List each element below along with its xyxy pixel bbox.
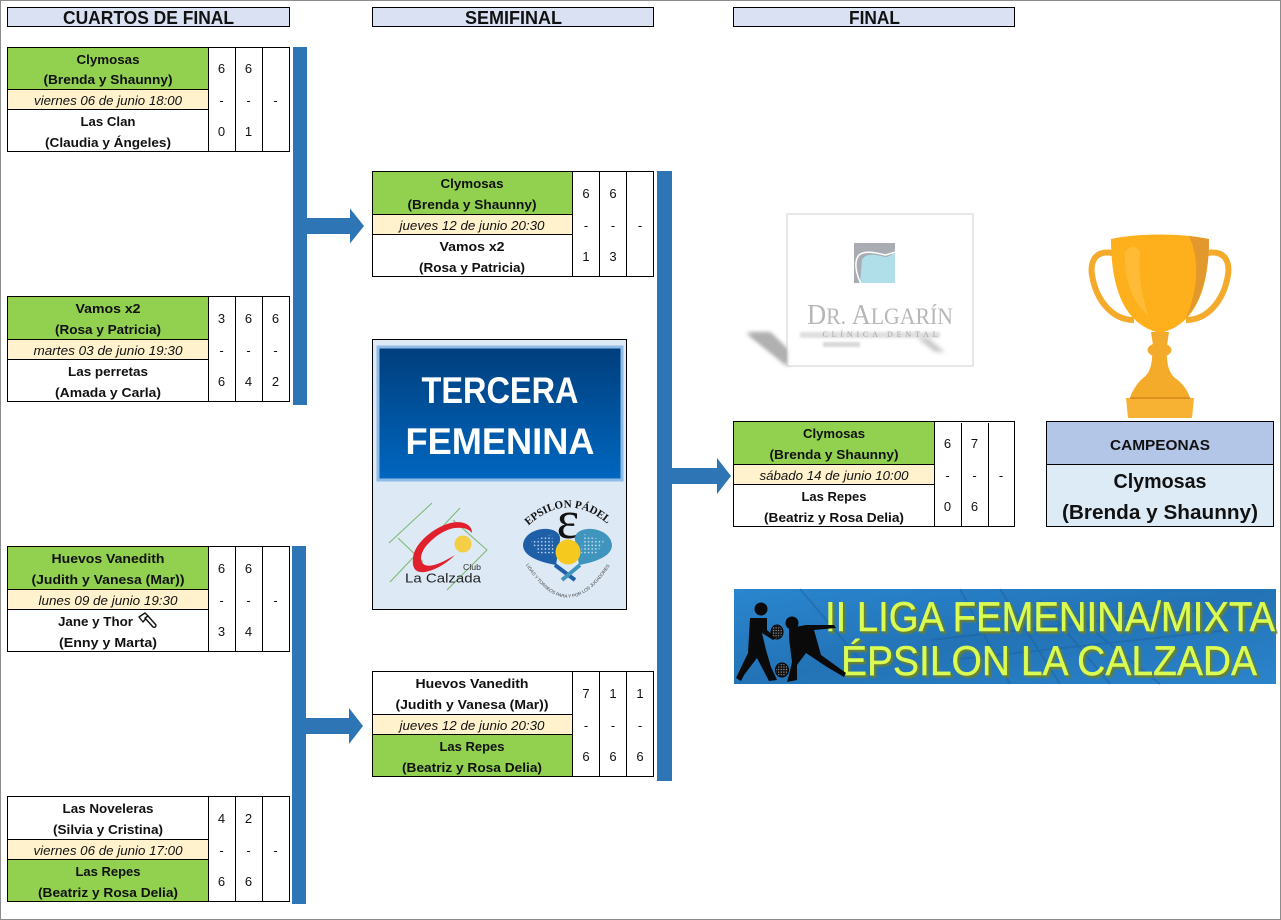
team 2: Las Repes — [802, 489, 866, 504]
team 1: Huevos Vanedith — [416, 676, 529, 691]
scores: 1 — [582, 249, 590, 264]
scores: - — [273, 93, 278, 108]
team 2: Las Repes — [440, 739, 504, 754]
bracket connector: lower quarterfinals to semifinal — [292, 546, 363, 904]
scores — [944, 436, 1003, 514]
icon: gold trophy — [1092, 234, 1228, 418]
team 1: (Judith y Vanesa (Mar)) — [32, 572, 185, 587]
team 1: Huevos Vanedith — [52, 551, 165, 566]
team 1: (Judith y Vanesa (Mar)) — [396, 697, 549, 712]
team 1 — [44, 52, 172, 87]
team 2 — [38, 864, 178, 900]
team 2: (Claudia y Ángeles) — [45, 135, 171, 150]
title box — [378, 347, 622, 480]
team 1: (Silvia y Cristina) — [53, 822, 163, 837]
team 1 — [53, 801, 163, 837]
match: quarterfinal 4 — [8, 796, 290, 902]
scores — [218, 61, 278, 139]
team 1: Vamos x2 — [76, 301, 140, 316]
team 2 — [55, 364, 161, 400]
team 2 — [419, 239, 525, 275]
scores: - — [999, 468, 1003, 483]
scores: - — [246, 843, 251, 858]
scores: - — [273, 593, 278, 608]
scores: 7 — [582, 686, 590, 701]
champion name: (Brenda y Shaunny) — [1062, 502, 1258, 524]
banner text: ÉPSILON LA CALZADA — [841, 637, 1257, 684]
banner text shadow — [827, 595, 1277, 686]
scores: 1 — [609, 686, 617, 701]
match date: jueves 12 de junio 20:30 — [397, 718, 545, 733]
scores — [582, 686, 644, 764]
scores: 2 — [245, 811, 252, 826]
team 1: Las Noveleras — [62, 801, 154, 816]
match: semifinal 1 — [372, 172, 654, 276]
bracket connector: semifinals to final — [657, 171, 731, 781]
logo: club la calzada: Club — [463, 562, 481, 572]
icon: padel players silhouettes — [736, 602, 846, 682]
scores: - — [972, 468, 977, 483]
team 1: Clymosas — [803, 426, 865, 441]
team 2: (Amada y Carla) — [55, 385, 161, 400]
heading: final — [734, 8, 1014, 28]
scores: 2 — [272, 374, 279, 389]
champion header: CAMPEONAS — [1110, 438, 1210, 454]
scores: 0 — [944, 499, 951, 514]
team 2: (Enny y Marta) — [59, 635, 157, 650]
scores: - — [638, 218, 642, 233]
heading: semifinal — [372, 8, 654, 28]
scores: 6 — [582, 749, 590, 764]
team 1: (Brenda y Shaunny) — [44, 72, 172, 87]
icon: hammer — [139, 613, 156, 627]
team 1: (Brenda y Shaunny) — [408, 197, 536, 212]
scores: 7 — [971, 436, 978, 451]
heading: final: FINAL — [849, 8, 900, 28]
scores: 6 — [245, 61, 252, 76]
scores: 6 — [218, 61, 225, 76]
scores: - — [246, 593, 251, 608]
team 1: Clymosas — [76, 52, 140, 67]
scores: 6 — [971, 499, 978, 514]
match date: sábado 14 de junio 10:00 — [760, 468, 909, 483]
team 1 — [55, 301, 161, 337]
scores: 4 — [245, 624, 252, 639]
scores: - — [611, 218, 615, 233]
team 2: Vamos x2 — [440, 239, 504, 254]
scores: 3 — [218, 624, 225, 639]
logo: epsilon padel: LIGAS Y TORNEOS PARA Y POR LOS JUGADORES — [526, 563, 610, 598]
match date: viernes 06 de junio 17:00 — [34, 843, 183, 858]
scores: 6 — [245, 874, 252, 889]
scores: - — [945, 468, 950, 483]
logo: club la calzada — [389, 503, 487, 590]
team 2: (Beatriz y Rosa Delia) — [38, 885, 178, 900]
scores: - — [611, 718, 615, 733]
team 2: Las perretas — [68, 364, 148, 379]
team 2: Jane y Thor — [58, 614, 133, 629]
scores: 6 — [218, 874, 225, 889]
scores — [218, 811, 278, 889]
team 2 — [45, 114, 171, 150]
scores: 6 — [636, 749, 644, 764]
logo: epsilon padel: EPSILON PÁDEL — [524, 500, 609, 526]
team 2 — [764, 489, 904, 525]
team 2 — [402, 739, 542, 775]
scores: 6 — [218, 374, 225, 389]
scores: 6 — [609, 186, 617, 201]
logo: epsilon padel: ε — [557, 490, 579, 550]
scores: - — [246, 93, 251, 108]
scores: 4 — [218, 811, 225, 826]
scores: 1 — [245, 124, 252, 139]
logo: dr algarin clinica dental: CLÍNICA DENTAL — [822, 329, 938, 339]
scores: - — [219, 843, 224, 858]
scores: 3 — [218, 311, 225, 326]
scores: 6 — [609, 749, 617, 764]
scores: 6 — [245, 561, 252, 576]
team 1: Clymosas — [440, 176, 504, 191]
team 1 — [32, 551, 185, 587]
champion name — [1062, 471, 1258, 524]
logo: epsilon padel — [523, 490, 612, 598]
team 2: (Rosa y Patricia) — [419, 260, 525, 275]
panel: campeonas — [1046, 422, 1274, 526]
scores: - — [584, 218, 588, 233]
team 1: (Rosa y Patricia) — [55, 322, 161, 337]
team 2: Las Repes — [76, 864, 140, 879]
scores — [218, 561, 278, 639]
scores: - — [219, 93, 224, 108]
scores: 3 — [609, 249, 617, 264]
match: quarterfinal 1 — [8, 48, 290, 152]
match: final — [734, 422, 1014, 526]
match: semifinal 2 — [372, 672, 654, 776]
heading: semifinal: SEMIFINAL — [465, 8, 562, 28]
scores: - — [246, 343, 251, 358]
banner: ii liga femenina mixta epsilon la calzada — [734, 589, 1277, 686]
match date: jueves 12 de junio 20:30 — [397, 218, 545, 233]
team 1 — [770, 426, 898, 462]
scores: - — [219, 593, 224, 608]
bracket connector: upper quarterfinals to semifinal — [293, 47, 364, 405]
scores: - — [219, 343, 224, 358]
team 2 — [58, 614, 157, 650]
champion name: Clymosas — [1114, 471, 1206, 493]
scores: 6 — [582, 186, 590, 201]
scores: - — [273, 343, 278, 358]
banner text shadow: ÉPSILON LA CALZADA — [843, 639, 1259, 686]
logo: dr algarin clinica dental — [747, 214, 973, 366]
team 1 — [408, 176, 536, 212]
logo: dr algarin clinica dental: DR. ALGARÍN — [807, 300, 953, 331]
match: quarterfinal 2 — [8, 296, 290, 402]
team 1: (Brenda y Shaunny) — [770, 447, 898, 462]
panel: tercera femenina — [372, 339, 627, 610]
title box: TERCERA — [422, 370, 578, 411]
scores: 1 — [636, 686, 644, 701]
match date: lunes 09 de junio 19:30 — [38, 593, 178, 608]
match date: viernes 06 de junio 18:00 — [34, 93, 183, 108]
heading: cuartos de final — [8, 8, 290, 28]
banner text — [825, 593, 1275, 684]
logo: club la calzada: La Calzada — [405, 570, 482, 586]
scores: 6 — [272, 311, 279, 326]
scores: 6 — [218, 561, 225, 576]
scores: - — [584, 718, 588, 733]
scores: 6 — [245, 311, 252, 326]
scores — [218, 311, 279, 389]
team 2: Las Clan — [80, 114, 136, 129]
title box: FEMENINA — [406, 421, 594, 462]
scores — [582, 186, 642, 264]
scores: - — [273, 843, 278, 858]
team 2: (Beatriz y Rosa Delia) — [402, 760, 542, 775]
scores: 6 — [944, 436, 951, 451]
team 1 — [396, 676, 548, 712]
match date: martes 03 de junio 19:30 — [34, 343, 183, 358]
scores: 0 — [218, 124, 225, 139]
scores: - — [638, 718, 642, 733]
scores: 4 — [245, 374, 252, 389]
match: quarterfinal 3 — [8, 546, 290, 652]
team 2: (Beatriz y Rosa Delia) — [764, 510, 904, 525]
heading: cuartos de final: CUARTOS DE FINAL — [63, 8, 234, 28]
